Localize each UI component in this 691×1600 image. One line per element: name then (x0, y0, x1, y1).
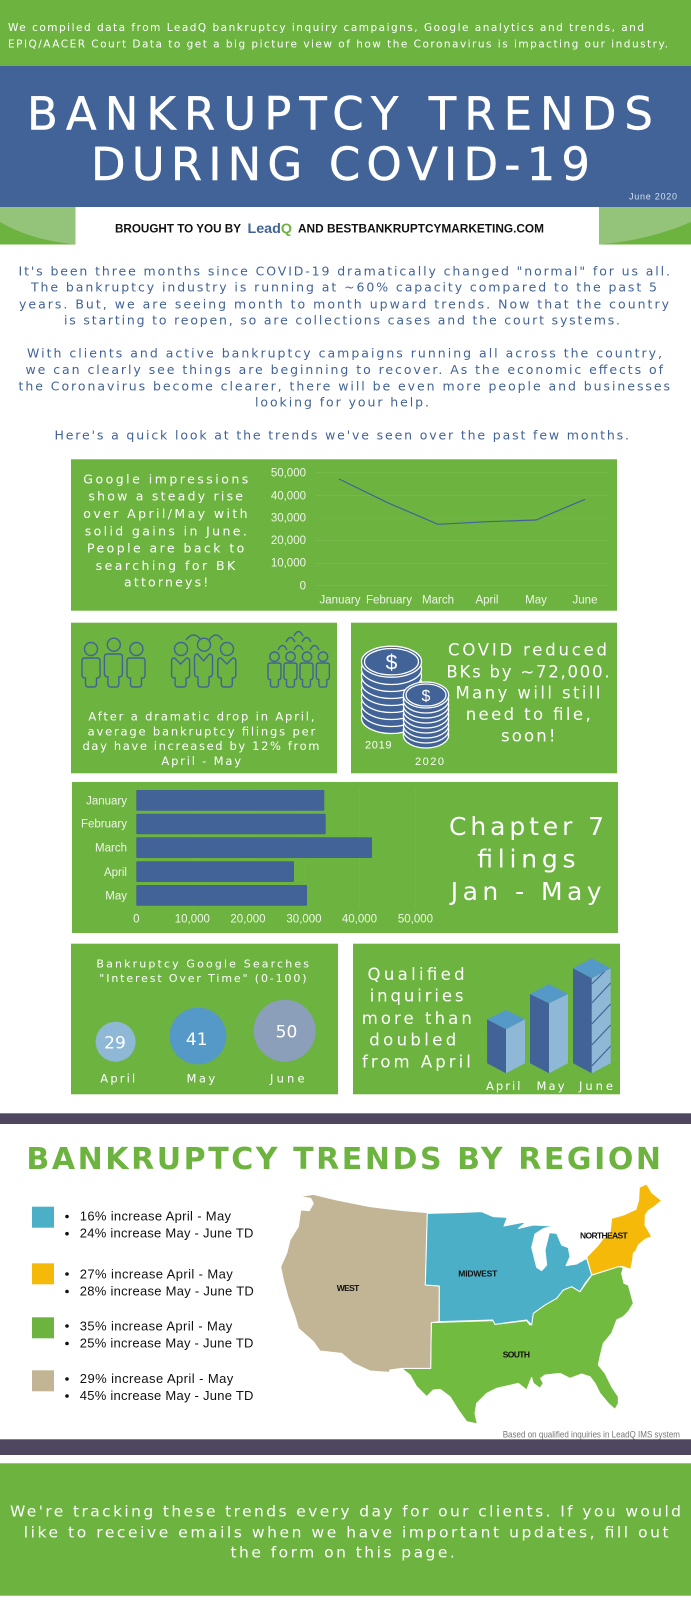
bar chart (81, 788, 433, 926)
line chart: June (573, 594, 597, 606)
legend: midwest (32, 1207, 253, 1241)
introduction text: is starting to reopen, so are collections cases and the court systems. (64, 313, 620, 328)
heading: trends by region: BANKRUPTCY TRENDS BY REGION (26, 1142, 661, 1177)
region: south (402, 1267, 633, 1424)
bar chart: 10,000 (175, 914, 210, 926)
region: west (281, 1194, 439, 1372)
line chart: 50,000 (271, 468, 306, 480)
3d bar: April: April (486, 1079, 520, 1093)
line chart: 30,000 (271, 513, 306, 525)
title banner: DURING COVID-19 (91, 138, 590, 191)
label: south: SOUTH (503, 1350, 530, 1360)
bar chart: April (104, 867, 127, 879)
text: google impressions note: Google impressions (83, 471, 248, 486)
divider bar: top of region section (0, 1113, 691, 1124)
introduction text: looking for your help. (255, 395, 429, 410)
text: google impressions note: solid gains in June. (85, 523, 247, 538)
panel: qualified inquiries (353, 944, 620, 1094)
line chart: 0 (300, 580, 306, 592)
title banner (0, 66, 691, 207)
panel: daily filings (71, 623, 337, 773)
circle: June 50: 50 (276, 1022, 297, 1042)
text: daily filings note: day have increased by 12% from (82, 739, 320, 753)
circle: May 41: May (186, 1071, 215, 1085)
introduction text: the Coronavirus become clearer, there will be even more people and businesses (18, 378, 670, 393)
circle: April 29: April (100, 1071, 135, 1085)
text: covid note: BKs by ~72,000. (446, 662, 610, 681)
icon: medium group of people (172, 635, 236, 687)
legend: south: 35% increase April - May (80, 1318, 233, 1333)
introduction text (18, 263, 670, 442)
legend: west: 29% increase April - May (80, 1371, 234, 1386)
heading: chapter 7 filings (449, 812, 604, 906)
introduction text: years. But, we are seeing month to month upward trends. Now that the country (19, 296, 670, 311)
text: google impressions note (83, 471, 248, 590)
line chart: 10,000 (271, 558, 306, 570)
intro banner: EPIQ/AACER Court Data to get a big picture view of how the Coronavirus is impacting our industry. (8, 39, 668, 51)
bar chart: 50,000 (398, 914, 433, 926)
footer call to action (0, 1463, 691, 1596)
circle: May 41: 41 (186, 1030, 208, 1050)
legend: midwest: 16% increase April - May (80, 1209, 232, 1224)
introduction text: It's been three months since COVID-19 dramatically changed "normal" for us all. (18, 263, 670, 278)
panel: google impressions (71, 459, 617, 611)
text: covid note: COVID reduced (448, 641, 607, 660)
3d bar: May: May (536, 1079, 565, 1093)
legend: west: 45% increase May - June TD (80, 1388, 253, 1403)
footer call to action: like to receive emails when we have important updates, fill out (24, 1523, 669, 1541)
icon: 2020 coin stack: $ (422, 688, 431, 705)
text: qualified inquiries note: more than (362, 1009, 472, 1028)
bar chart: 30,000 (286, 914, 322, 926)
title banner: BANKRUPTCY TRENDS (27, 87, 653, 140)
circle: June 50: June (269, 1071, 305, 1085)
text: qualified inquiries note: Qualified (368, 965, 465, 984)
3d bar: May (530, 984, 568, 1093)
text: google impressions note: show a steady rise (88, 489, 243, 504)
panel: covid reduced filings (351, 623, 617, 773)
text: daily filings note: April - May (161, 754, 241, 768)
region: midwest (425, 1212, 592, 1325)
sponsor ribbon: LeadQ (248, 220, 292, 236)
text: qualified inquiries note: from April (362, 1052, 471, 1071)
legend: south (32, 1317, 253, 1351)
text: qualified inquiries note: inquiries (370, 987, 464, 1006)
heading: interest over time: "Interest Over Time" (0-100) (99, 972, 306, 985)
3d bar: June (573, 958, 613, 1093)
line chart: May (525, 594, 547, 606)
legend: northeast: 28% increase May - June TD (80, 1284, 254, 1299)
sponsor ribbon (0, 207, 691, 244)
text: covid note (446, 641, 610, 746)
line chart: April (475, 594, 499, 606)
footer call to action: We're tracking these trends every day for our clients. If you would (10, 1503, 681, 1521)
footer call to action: the form on this page. (230, 1544, 455, 1562)
text: google impressions note: People are back to (87, 541, 244, 556)
legend: northeast (32, 1263, 254, 1299)
introduction text: Here's a quick look at the trends we've seen over the past few months. (54, 427, 629, 442)
legend: midwest: 24% increase May - June TD (80, 1226, 253, 1241)
label: northeast: NORTHEAST (580, 1230, 628, 1240)
text: covid note: soon! (501, 727, 556, 746)
text: covid note: Many will still (456, 683, 600, 702)
icon: small group of people (82, 638, 145, 687)
legend: south: 25% increase May - June TD (80, 1336, 253, 1351)
line chart: January (320, 594, 361, 606)
bar chart: 20,000 (230, 914, 266, 926)
circle: June 50 (254, 1000, 316, 1085)
divider bar: bottom of region section (0, 1439, 691, 1455)
bar chart: 40,000 (342, 914, 377, 926)
3d bar: June: June (578, 1079, 613, 1093)
icon: 2019 coin stack (362, 646, 422, 734)
text: google impressions note: over April/May with (83, 506, 248, 521)
introduction text: With clients and active bankruptcy campaigns running all across the country, (27, 345, 662, 360)
icon: large group of people (268, 632, 329, 687)
bar chart: 0 (133, 914, 140, 926)
text: covid note: need to file, (466, 705, 591, 724)
text: google impressions note: searching for BK (96, 558, 236, 573)
heading: chapter 7 filings: Jan - May (449, 877, 602, 906)
sponsor ribbon: AND BESTBANKRUPTCYMARKETING.COM (298, 221, 544, 235)
line chart (271, 468, 609, 606)
map: united states regions (281, 1184, 662, 1424)
circle: May 41 (170, 1008, 226, 1085)
bar chart: March (95, 843, 127, 855)
heading: chapter 7 filings: filings (477, 844, 576, 873)
intro banner: We compiled data from LeadQ bankruptcy inquiry campaigns, Google analytics and trends, and (8, 22, 644, 34)
introduction text: we can clearly see things are beginning to recover. As the economic effects of (26, 362, 664, 377)
region: northeast (587, 1184, 662, 1275)
line chart: 40,000 (271, 490, 306, 502)
text: daily filings note: After a dramatic drop in April, (88, 710, 315, 724)
text: daily filings note (82, 710, 320, 768)
bar chart: February (81, 819, 127, 831)
bar chart: January (86, 795, 127, 807)
line chart: February (366, 594, 412, 606)
text: qualified inquiries note (362, 965, 472, 1071)
heading: interest over time: Bankruptcy Google Searches (96, 957, 309, 970)
heading: chapter 7 filings: Chapter 7 (449, 812, 604, 841)
label: west: WEST (337, 1283, 360, 1293)
3d bar: April (486, 1010, 525, 1093)
line chart: March (422, 594, 454, 606)
icon: 2019 coin stack: $ (386, 652, 398, 674)
text: google impressions note: attorneys! (124, 575, 208, 590)
introduction text: The bankruptcy industry is running at ~60% capacity compared to the past 5 (30, 280, 657, 295)
text: daily filings note: average bankruptcy filings per (88, 724, 315, 738)
title banner: June 2020 (629, 191, 677, 201)
label: 2019: 2019 (365, 739, 392, 751)
intro banner (0, 0, 691, 66)
panel: google searches interest (71, 944, 338, 1094)
icon: 2020 coin stack (403, 682, 449, 748)
label: midwest: MIDWEST (458, 1269, 498, 1279)
text: qualified inquiries note: doubled (369, 1031, 456, 1050)
heading: interest over time (96, 957, 309, 985)
sponsor ribbon: BROUGHT TO YOU BY (115, 221, 241, 235)
circle: April 29 (96, 1022, 136, 1085)
bar chart: May (105, 890, 127, 902)
legend: northeast: 27% increase April - May (80, 1266, 233, 1281)
panel: chapter 7 filings (72, 782, 618, 933)
circle: April 29: 29 (104, 1033, 126, 1053)
legend: west (32, 1370, 253, 1403)
line chart: 20,000 (271, 535, 306, 547)
label: 2020: 2020 (415, 756, 444, 768)
